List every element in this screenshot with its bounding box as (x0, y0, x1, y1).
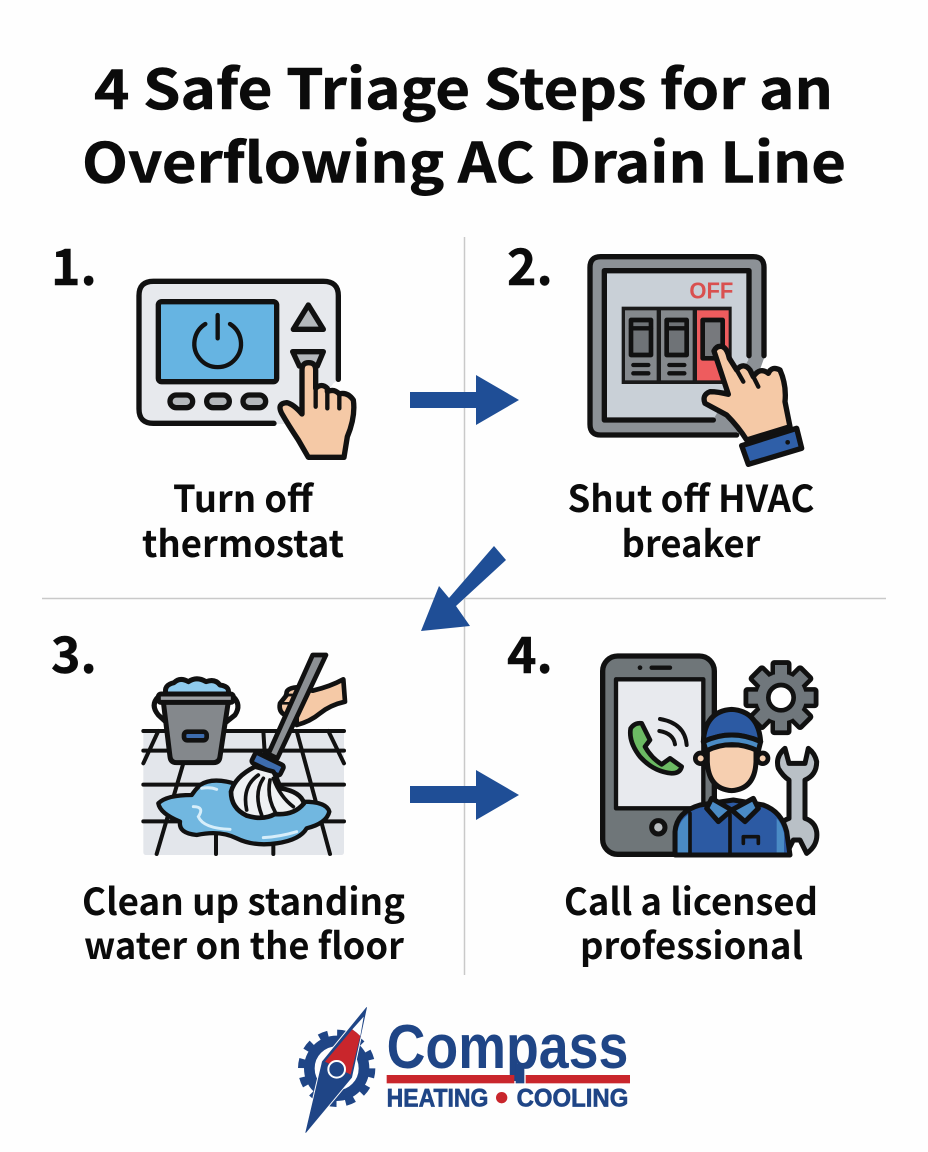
puddle (158, 781, 329, 844)
step 2 label: breaker (622, 514, 761, 568)
step 2 label (568, 469, 814, 568)
compass needle (306, 1007, 367, 1133)
logo: Compass Heating Cooling (302, 1007, 630, 1133)
step 3 label: water on the floor (84, 916, 405, 970)
OFF label: OFF (689, 277, 733, 303)
phone (603, 656, 714, 854)
wrench (777, 748, 817, 853)
mop (268, 655, 326, 758)
step 1 label: Turn off (173, 469, 314, 523)
icon: bucket and mop on wet floor (143, 655, 345, 855)
step 1 number: 1. (51, 228, 97, 300)
tagline (387, 1084, 628, 1112)
title: 4 Safe Triage Steps for an (94, 45, 833, 125)
bucket (154, 679, 238, 763)
step 3 label (82, 872, 405, 970)
arrow: step 1 to 2 (410, 375, 519, 425)
step 1 label: thermostat (142, 514, 344, 568)
arrow: step 3 to 4 (410, 770, 519, 820)
logo gear (302, 1034, 371, 1103)
gear (746, 663, 816, 733)
title (82, 45, 846, 198)
title: Overflowing AC Drain Line (82, 118, 846, 198)
step 1 label (142, 469, 344, 568)
brand name: Compass (387, 1013, 628, 1082)
step 2 label: Shut off HVAC (568, 469, 814, 523)
step 4 label: professional (580, 916, 803, 970)
step 4 number: 4. (507, 616, 553, 688)
cuff (742, 428, 802, 464)
technician (675, 709, 790, 855)
step 3 label: Clean up standing (82, 872, 405, 926)
arrow: step 2 to 3 (421, 546, 506, 631)
step 4 label: Call a licensed (564, 872, 818, 926)
tagline: COOLING (517, 1084, 628, 1112)
tagline: HEATING (387, 1084, 488, 1112)
step 2 number: 2. (507, 228, 553, 300)
step 3 number: 3. (51, 616, 97, 688)
icon: breaker panel with hand (590, 257, 802, 464)
icon: thermostat with pressing hand (138, 281, 354, 457)
icon: phone call and technician (603, 656, 817, 855)
hand (280, 679, 345, 725)
step 4 label (564, 872, 818, 970)
